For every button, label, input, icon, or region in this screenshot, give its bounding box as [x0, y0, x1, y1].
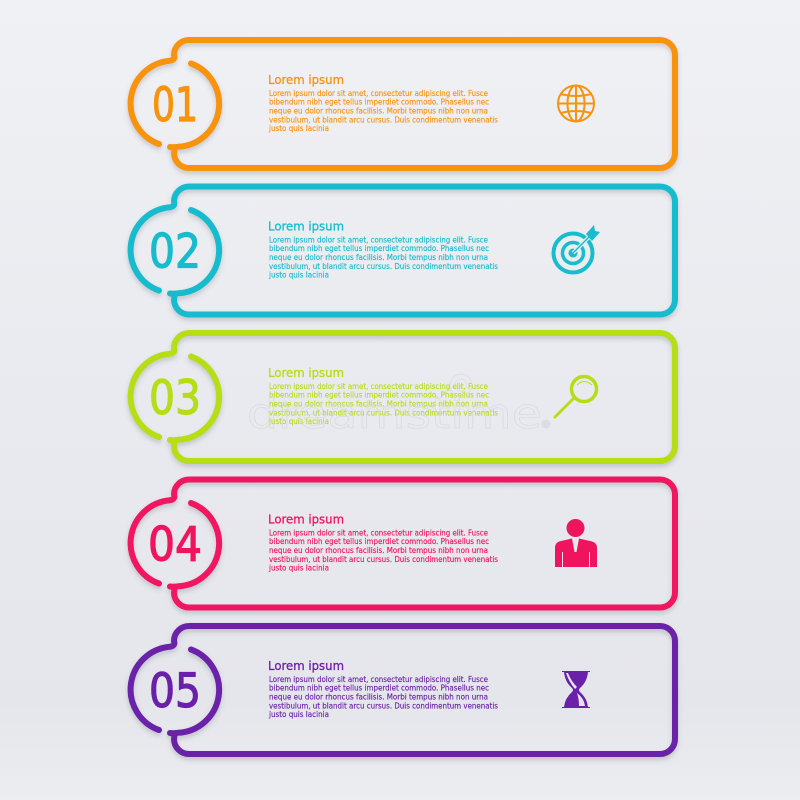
icon: magnifying glass — [555, 376, 596, 417]
body text: neque eu dolor rhoncus facilisis. Morbi tempus nibh non urna — [269, 692, 488, 702]
outline and number ring — [131, 333, 675, 461]
icon: businessman — [555, 519, 597, 567]
body text: vestibulum, ut blandit arcu cursus. Duis condimentum venenatis — [269, 701, 498, 710]
panel 2: teal — [131, 186, 675, 314]
body text: justo quis lacinia — [268, 124, 329, 133]
heading: Lorem ipsum — [268, 658, 344, 673]
body text: Lorem ipsum dolor sit amet, consectetur adipiscing elit. Fusce — [269, 675, 488, 684]
body text: vestibulum, ut blandit arcu cursus. Duis condimentum venenatis — [269, 262, 498, 271]
outline and number ring — [131, 186, 675, 314]
body text: Lorem ipsum dolor sit amet, consectetur adipiscing elit. Fusce — [269, 236, 488, 244]
body text: justo quis lacinia — [268, 710, 329, 719]
body text — [268, 236, 498, 280]
icon: hourglass — [562, 671, 590, 708]
number 03: 03 — [149, 371, 201, 426]
panel 5: purple — [131, 626, 675, 754]
body text: bibendum nibh eget tellus imperdiet commodo. Phasellus nec — [269, 684, 489, 693]
number 04: 04 — [148, 518, 202, 572]
body text: vestibulum, ut blandit arcu cursus. Duis condimentum venenatis — [269, 408, 498, 417]
body text: Lorem ipsum dolor sit amet, consectetur adipiscing elit. Fusce — [269, 528, 488, 538]
outline and number ring — [131, 626, 675, 754]
body text: Lorem ipsum dolor sit amet, consectetur adipiscing elit. Fusce — [269, 382, 488, 391]
body text: justo quis lacinia — [268, 270, 329, 280]
body text — [268, 528, 498, 572]
panel 1: orange — [131, 40, 675, 168]
heading: Lorem ipsum — [268, 72, 344, 87]
panel 3: lime — [131, 333, 675, 461]
outline and number ring — [131, 40, 675, 168]
body text: neque eu dolor rhoncus facilisis. Morbi tempus nibh non urna — [269, 106, 488, 116]
body text: bibendum nibh eget tellus imperdiet commodo. Phasellus nec — [269, 98, 489, 107]
outline and number ring — [131, 480, 675, 608]
body text — [268, 89, 498, 133]
watermark — [247, 374, 550, 438]
body text — [268, 382, 498, 426]
body text: Lorem ipsum dolor sit amet, consectetur adipiscing elit. Fusce — [269, 89, 488, 98]
watermark: dreamstime — [247, 389, 542, 438]
number 02: 02 — [149, 224, 201, 280]
body text: vestibulum, ut blandit arcu cursus. Duis condimentum venenatis — [269, 115, 498, 124]
icon: target with arrow — [554, 225, 600, 272]
number 01: 01 — [152, 78, 198, 133]
body text — [268, 675, 498, 719]
body text: justo quis lacinia — [268, 564, 329, 572]
number 05: 05 — [149, 664, 201, 719]
body text: bibendum nibh eget tellus imperdiet commodo. Phasellus nec — [269, 244, 489, 253]
heading: Lorem ipsum — [268, 365, 344, 380]
body text: justo quis lacinia — [268, 417, 329, 426]
body text: bibendum nibh eget tellus imperdiet commodo. Phasellus nec — [269, 391, 489, 400]
body text: neque eu dolor rhoncus facilisis. Morbi tempus nibh non urna — [269, 546, 488, 555]
body text: neque eu dolor rhoncus facilisis. Morbi tempus nibh non urna — [269, 400, 488, 408]
panel 4: pink — [131, 480, 675, 608]
body text: neque eu dolor rhoncus facilisis. Morbi tempus nibh non urna — [269, 253, 488, 262]
body text: bibendum nibh eget tellus imperdiet commodo. Phasellus nec — [269, 537, 489, 546]
heading: Lorem ipsum — [268, 512, 344, 526]
heading: Lorem ipsum — [268, 218, 344, 234]
icon: globe — [558, 86, 594, 122]
body text: vestibulum, ut blandit arcu cursus. Duis condimentum venenatis — [269, 555, 498, 564]
